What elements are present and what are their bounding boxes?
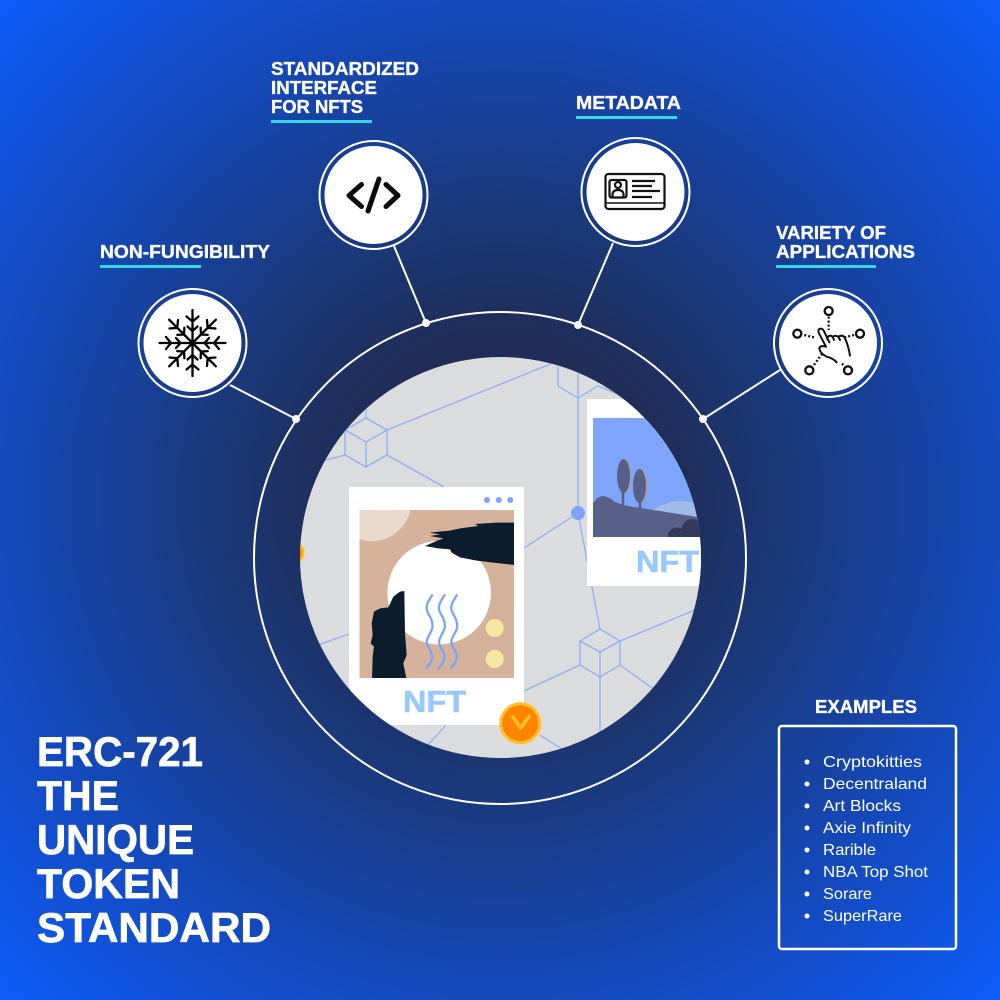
examples list [804,754,929,925]
network lines and cubes [318,350,695,749]
heading: non-fungibility: NON-FUNGIBILITY [100,242,270,262]
examples list: Rarible [823,842,876,859]
central illustration: NFT cards on blockchain network [300,357,701,758]
network node [571,506,585,520]
title [37,728,271,951]
title: TOKEN [37,860,180,907]
title: STANDARD [37,904,271,951]
heading: metadata: METADATA [576,93,681,113]
examples list: Decentraland [823,776,927,793]
heading: variety of applications: APPLICATIONS [776,242,915,262]
examples heading: EXAMPLES [815,697,917,717]
examples list: Axie Infinity [823,820,911,837]
examples box [779,726,956,949]
NFT card right [587,399,710,586]
ring nodes [292,319,707,423]
examples panel [779,697,956,949]
examples list: Art Blocks [823,798,901,815]
abstract artwork [360,510,514,678]
icon: code brackets [320,141,428,249]
connector lines and ring [230,243,780,804]
title: THE [37,772,119,819]
examples list: SuperRare [823,908,902,925]
check coin [499,702,541,744]
examples list: Cryptokitties [823,754,922,771]
left coin [300,544,304,564]
examples list: Sorare [823,886,872,903]
heading: variety of applications [776,223,915,268]
icon: hand touch network [774,289,882,397]
heading: standardized interface: INTERFACE [271,78,377,98]
examples list: NBA Top Shot [823,864,929,881]
title: UNIQUE [37,816,194,863]
heading: variety of applications: VARIETY OF [776,223,886,243]
landscape artwork [593,418,700,537]
NFT card left: NFT [403,684,466,719]
heading: standardized interface: FOR NFTS [271,97,363,117]
heading: standardized interface: STANDARDIZED [271,59,419,79]
menu dots [484,497,513,503]
NFT card left [349,487,524,725]
NFT card right: NFT [636,544,699,579]
disc background [290,350,710,770]
icon: id card [582,138,690,246]
title: ERC-721 [37,728,203,775]
heading: standardized interface [271,59,419,123]
icon: snowflake [138,289,246,397]
